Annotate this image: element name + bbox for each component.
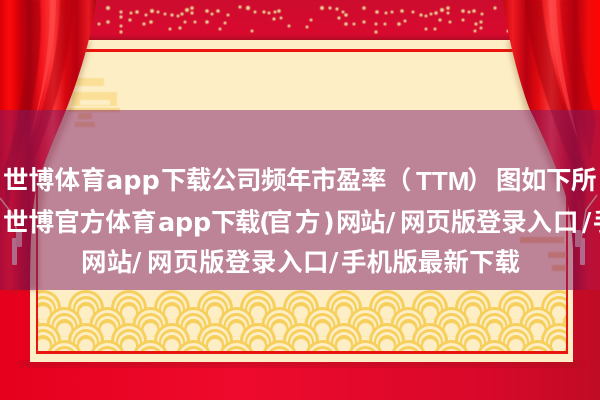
headline line 1: 图如下所	[496, 166, 596, 196]
cloud ornament left	[68, 78, 120, 127]
headline line 2: 网页版登录入	[400, 208, 552, 238]
top red band	[0, 0, 600, 40]
headline line 1: app	[106, 166, 160, 196]
headline line 2: 口	[553, 208, 579, 238]
headline line 2	[3, 208, 600, 238]
headline line 2: /	[582, 208, 591, 238]
headline line 3: /	[329, 248, 338, 278]
headline line 1: TTM	[416, 166, 469, 196]
translucent text banner	[0, 110, 600, 290]
right curtain	[503, 0, 600, 290]
left tassel	[0, 198, 22, 265]
headline line 1: ）	[467, 166, 493, 196]
headline line 3: /	[132, 248, 141, 278]
headline line 2: )	[323, 208, 335, 238]
headline line 1: （	[386, 166, 412, 196]
left curtain	[0, 0, 96, 290]
headline line 3: 网站	[81, 248, 133, 278]
headline line 2: (	[259, 208, 271, 238]
cloud ornament right	[520, 237, 566, 271]
right tassel	[575, 195, 597, 265]
curtain shadows	[5, 40, 595, 290]
headline line 2: 下载	[211, 208, 259, 238]
headline line 1	[3, 166, 596, 196]
headline line 3	[81, 248, 520, 278]
gold confetti	[98, 5, 510, 34]
headline line 2: 网站	[336, 208, 384, 238]
headline line 3: 网页版登录入口	[147, 248, 329, 278]
headline line 2: /	[386, 208, 395, 238]
headline line 1: 世博体育	[3, 166, 106, 196]
headline line 2: 官方	[267, 208, 323, 238]
headline line 3: 手机版最新下载	[341, 248, 520, 278]
headline line 2: app	[158, 208, 211, 238]
cream framed panel	[30, 40, 573, 362]
scale wave pattern	[38, 290, 566, 351]
headline line 2: 世博官方体育	[3, 208, 157, 238]
headline line 1: 下载公司频年市盈率	[161, 166, 386, 196]
